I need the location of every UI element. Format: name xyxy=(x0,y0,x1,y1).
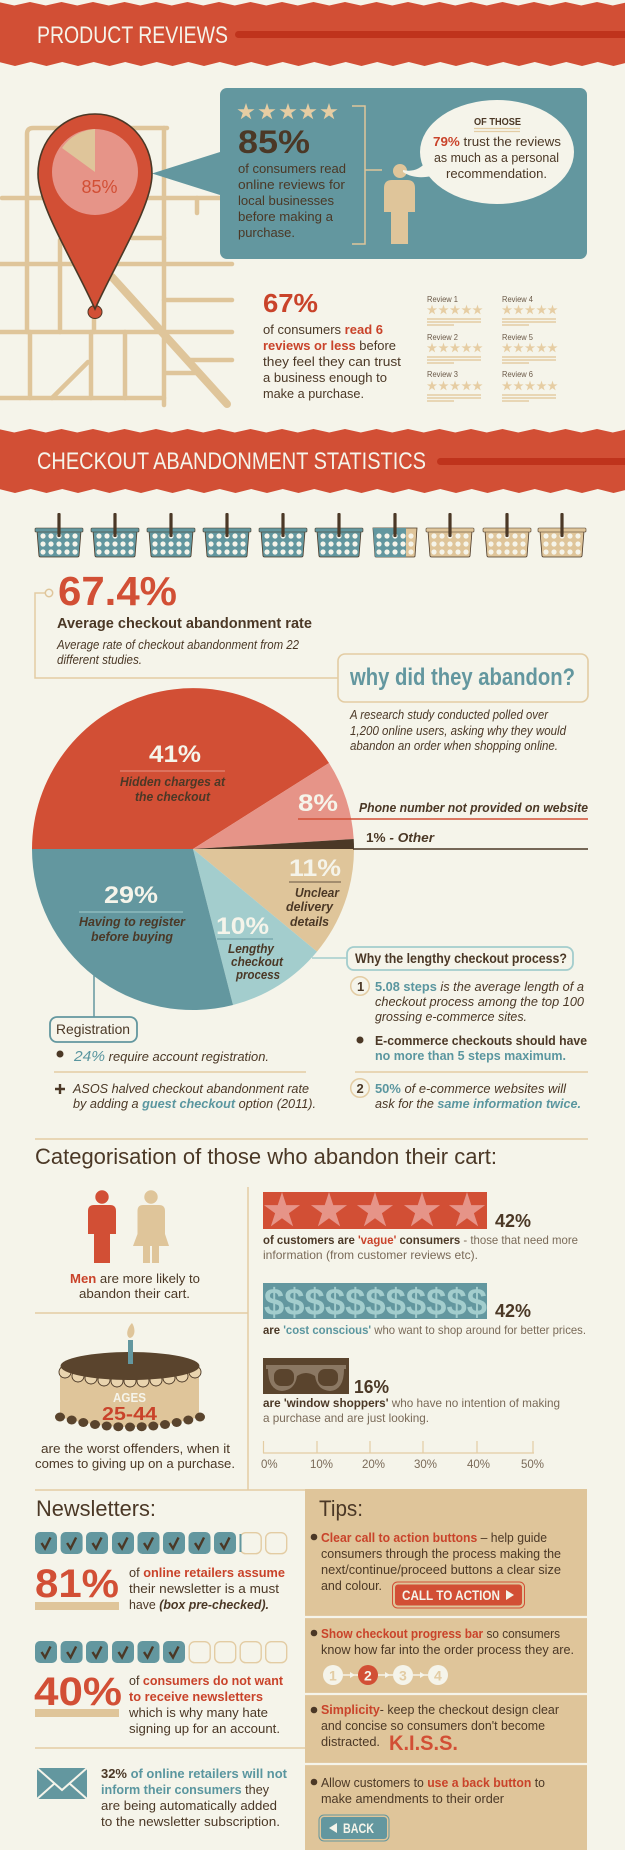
stat: 67.4%: Average checkout abandonment rate xyxy=(57,616,312,632)
bar: cost conscious 42%: are 'cost conscious' who want to shop around for better prices. xyxy=(263,1323,586,1337)
stat: 67%: 67% xyxy=(263,288,318,318)
tip: simplicity: K.I.S.S. xyxy=(389,1732,458,1755)
slice label: 11%: details xyxy=(290,915,329,929)
text: worst offenders: comes to giving up on a purchase. xyxy=(35,1456,235,1471)
tip: progress bar: know how far into the order process they are. xyxy=(321,1642,574,1657)
bar: cost conscious 42% xyxy=(263,1282,586,1337)
heading: tips: Tips: xyxy=(319,1496,363,1521)
description: online reviews for xyxy=(238,177,346,192)
bar: cost conscious 42%: 42% xyxy=(495,1301,531,1321)
85% figure: 85% xyxy=(238,124,310,160)
text: research study: A research study conducted polled over xyxy=(349,708,549,722)
slice label: 11%: delivery xyxy=(286,900,334,914)
callout: registration: Registration xyxy=(56,1021,130,1037)
stat: 81%: their newsletter is a must xyxy=(129,1581,279,1596)
stat: 81%: 81% xyxy=(35,1562,119,1606)
list item: max 5 steps: E-commerce checkouts should have xyxy=(375,1033,587,1048)
heading: checkout abandonment statistics: CHECKOUT ABANDONMENT STATISTICS xyxy=(37,448,426,475)
list item 2: 50%: 2 xyxy=(356,1081,364,1096)
stat: 81% xyxy=(35,1562,285,1612)
text: worst offenders xyxy=(35,1441,235,1471)
speech bubble: as much as a personal xyxy=(434,150,559,165)
stat: 40%: which is why many hate xyxy=(128,1705,268,1720)
panel: tips xyxy=(305,1489,587,1850)
tip: back button: make amendments to their order xyxy=(321,1791,505,1806)
list item 1: 5.08 steps: grossing e-commerce sites. xyxy=(375,1010,527,1024)
mini reviews grid: Review 5 xyxy=(502,332,533,342)
person with speech bubble xyxy=(384,164,415,244)
speech bubble: recommendation. xyxy=(446,166,547,181)
list item: max 5 steps: no more than 5 steps maximum. xyxy=(375,1048,566,1063)
connector line xyxy=(35,593,338,678)
registration fact: ASOS: ASOS halved checkout abandonment rate xyxy=(72,1082,309,1096)
slice label: 29%: before buying xyxy=(91,930,173,944)
description: local businesses xyxy=(238,193,334,208)
bar: window shoppers 16%: a purchase and are just looking. xyxy=(263,1411,429,1425)
button: call to action xyxy=(392,1582,524,1608)
list item 1: 5.08 steps: 1 xyxy=(357,979,364,994)
text: 32% of retailers xyxy=(101,1766,288,1829)
text: men more likely xyxy=(70,1271,200,1301)
registration fact: ASOS xyxy=(55,1082,316,1111)
stat: 67%: a business enough to xyxy=(263,370,387,385)
button: back: BACK xyxy=(343,1821,374,1836)
chart axis: 10% xyxy=(310,1459,333,1471)
icon: birthday cake: 25-44 xyxy=(102,1404,157,1424)
map pin: 85% xyxy=(82,177,118,197)
registration fact: 24%: 24% require account registration. xyxy=(73,1048,269,1065)
mini reviews grid: Review 2 xyxy=(427,332,458,342)
checkboxes: 81% xyxy=(35,1532,287,1554)
map pin xyxy=(38,114,152,318)
checkboxes: 40% xyxy=(35,1641,287,1663)
banner: product reviews xyxy=(0,2,625,66)
baskets row xyxy=(35,513,586,557)
stat: 67%: of consumers read 6 xyxy=(263,322,383,337)
list item 2: 50% xyxy=(351,1079,581,1111)
chart axis xyxy=(261,1441,544,1471)
heading: product reviews: PRODUCT REVIEWS xyxy=(37,22,228,49)
list item 2: 50%: 50% of e-commerce websites will xyxy=(375,1082,567,1096)
description: before making a xyxy=(238,209,334,224)
tip: call to action: consumers through the process making the xyxy=(321,1546,561,1561)
slice label: 10%: Lengthy xyxy=(228,942,275,956)
chart axis: 0% xyxy=(261,1459,278,1471)
callout: why the lengthy checkout process: Why the lengthy checkout process? xyxy=(355,951,567,966)
slice label: 10%: checkout xyxy=(231,955,284,969)
stat: 67.4%: Average rate of checkout abandonment from 22 xyxy=(56,638,299,652)
pie label: phone number: Phone number not provided on website xyxy=(359,801,588,815)
text: research study: abandon an order when shopping online. xyxy=(350,739,558,753)
chart axis: 40% xyxy=(467,1459,490,1471)
tip: simplicity: distracted. xyxy=(321,1734,380,1749)
banner rule xyxy=(235,31,625,38)
stat: 81%: of online retailers assume xyxy=(129,1565,285,1580)
slice label: 41%: Hidden charges at xyxy=(120,775,226,789)
pointer xyxy=(152,152,220,195)
button: call to action: CALL TO ACTION xyxy=(402,1588,500,1603)
stat: 67%: reviews or less before xyxy=(263,338,396,353)
tip: simplicity xyxy=(311,1702,560,1755)
list item: max 5 steps xyxy=(356,1033,587,1063)
chart axis: 20% xyxy=(362,1459,385,1471)
stat: 67.4% xyxy=(45,568,312,667)
progress steps: 3 xyxy=(399,1668,407,1684)
text: worst offenders: are the worst offenders, when it xyxy=(41,1441,230,1456)
description: of consumers read xyxy=(238,161,346,176)
icon: man and woman xyxy=(88,1190,169,1263)
description xyxy=(238,161,346,240)
speech bubble xyxy=(403,100,574,204)
text: men more likely: abandon their cart. xyxy=(79,1286,190,1301)
bar: window shoppers 16%: 16% xyxy=(354,1377,389,1397)
callout: why the lengthy checkout process xyxy=(312,947,573,970)
list item 2: 50%: ask for the same information twice. xyxy=(375,1097,581,1111)
stat: 40% xyxy=(34,1670,284,1736)
bracket xyxy=(352,106,382,244)
icon: glasses xyxy=(266,1365,346,1391)
stat: 40%: of consumers do not want xyxy=(129,1673,284,1688)
text: 32% of retailers: 32% of online retailers will not xyxy=(101,1766,288,1781)
icon: envelope xyxy=(37,1768,87,1799)
slice label: 29%: 29% xyxy=(104,882,158,909)
tip: progress bar: Show checkout progress bar so consumers xyxy=(321,1626,560,1641)
rating stars xyxy=(237,103,338,119)
stat: 67% xyxy=(263,288,401,401)
heading: newsletters: Newsletters: xyxy=(36,1496,156,1521)
bar: vague consumers 42%: of customers are 'vague' consumers - those that need more xyxy=(263,1233,578,1247)
bar: vague consumers 42% xyxy=(263,1192,578,1262)
list item 1: 5.08 steps: checkout process among the top 100 xyxy=(375,995,584,1009)
stat: 40%: 40% xyxy=(34,1670,122,1714)
text: research study: 1,200 online users, asking why they would xyxy=(350,724,567,738)
panel: 85% read reviews xyxy=(152,88,587,259)
callout: registration xyxy=(50,975,137,1042)
mini reviews grid xyxy=(427,294,558,401)
progress steps: 4 xyxy=(434,1668,442,1684)
list item 1: 5.08 steps: 5.08 steps is the average length of a xyxy=(375,980,584,994)
mini reviews grid: Review 4 xyxy=(502,294,533,304)
stat: 81%: have (box pre-checked). xyxy=(129,1597,269,1612)
stat: 67%: make a purchase. xyxy=(263,386,364,401)
bar: vague consumers 42%: information (from customer reviews etc). xyxy=(263,1248,478,1262)
registration fact: ASOS: by adding a guest checkout option (2011). xyxy=(73,1097,316,1111)
tip: progress bar xyxy=(311,1626,574,1685)
map roads xyxy=(0,128,232,405)
callout: why did they abandon xyxy=(338,654,588,702)
icon: birthday cake: AGES xyxy=(113,1390,146,1405)
tip: call to action xyxy=(311,1530,561,1608)
speech bubble: OF THOSE xyxy=(474,116,521,128)
bar: vague consumers 42%: 42% xyxy=(495,1211,531,1231)
pie label: other: 1% - Other xyxy=(366,831,435,845)
slice label: 41%: 41% xyxy=(149,741,201,768)
banner: checkout abandonment statistics xyxy=(0,429,625,493)
button: back xyxy=(319,1815,389,1841)
text: 32% of retailers: inform their consumers they xyxy=(101,1782,269,1797)
stat: 40%: signing up for an account. xyxy=(129,1721,280,1736)
slice label: 10% xyxy=(216,913,284,982)
list item 1: 5.08 steps xyxy=(351,977,584,1024)
bar: window shoppers 16% xyxy=(263,1358,560,1425)
mini reviews grid: Review 3 xyxy=(427,369,458,379)
bar: cost conscious 42%: $$$$$$$$$$$ xyxy=(264,1282,487,1324)
callout: why did they abandon: why did they abandon? xyxy=(349,664,575,691)
tip: call to action: next/continue/proceed buttons a clear size xyxy=(321,1562,561,1577)
slice label: 8%: 8% xyxy=(298,790,338,817)
slice label: 41%: the checkout xyxy=(135,790,211,804)
description: purchase. xyxy=(238,225,295,240)
chart axis: 30% xyxy=(414,1459,437,1471)
mini reviews grid: Review 6 xyxy=(502,369,533,379)
chart axis: 50% xyxy=(521,1459,544,1471)
progress steps xyxy=(323,1665,448,1685)
stat: 40%: to receive newsletters xyxy=(129,1689,263,1704)
tip: simplicity: Simplicity- keep the checkout design clear xyxy=(321,1702,560,1717)
tip: call to action: and colour. xyxy=(321,1578,382,1593)
slice label: 11%: 11% xyxy=(289,855,341,882)
heading: categorisation: Categorisation of those who abandon their cart: xyxy=(35,1144,497,1169)
tip: simplicity: and concise so consumers don't become xyxy=(321,1718,545,1733)
tip: back button xyxy=(311,1775,545,1841)
slice label: 41% xyxy=(120,741,226,804)
slice label: 10%: process xyxy=(235,968,280,982)
speech bubble: 79% trust the reviews xyxy=(433,134,562,149)
pin pie xyxy=(52,129,138,215)
text: 32% of retailers: to the newsletter subscription. xyxy=(101,1814,280,1829)
icon: birthday cake xyxy=(55,1323,205,1432)
slice label: 29% xyxy=(79,882,186,944)
text: research study xyxy=(349,708,567,753)
tip: call to action: Clear call to action buttons – help guide xyxy=(321,1530,547,1545)
bar: window shoppers 16%: are 'window shoppers' who have no intention of making xyxy=(263,1396,560,1410)
banner rule xyxy=(437,458,625,465)
slice label: 11% xyxy=(286,855,341,929)
stat: 67.4%: 67.4% xyxy=(58,568,177,614)
progress steps: 2 xyxy=(364,1668,372,1684)
tip: back button: Allow customers to use a back button to xyxy=(321,1775,545,1790)
slice label: 10%: 10% xyxy=(216,913,269,940)
stat: 67%: they feel they can trust xyxy=(263,354,401,369)
text: men more likely: Men are more likely to xyxy=(70,1271,200,1286)
pie chart: reasons for abandonment xyxy=(32,688,354,1010)
stat: 67.4%: different studies. xyxy=(57,653,142,667)
slice label: 29%: Having to register xyxy=(79,915,186,929)
slice label: 11%: Unclear xyxy=(295,886,340,900)
progress steps: 1 xyxy=(329,1668,337,1684)
text: 32% of retailers: are being automatically added xyxy=(101,1798,277,1813)
mini reviews grid: Review 1 xyxy=(427,294,458,304)
